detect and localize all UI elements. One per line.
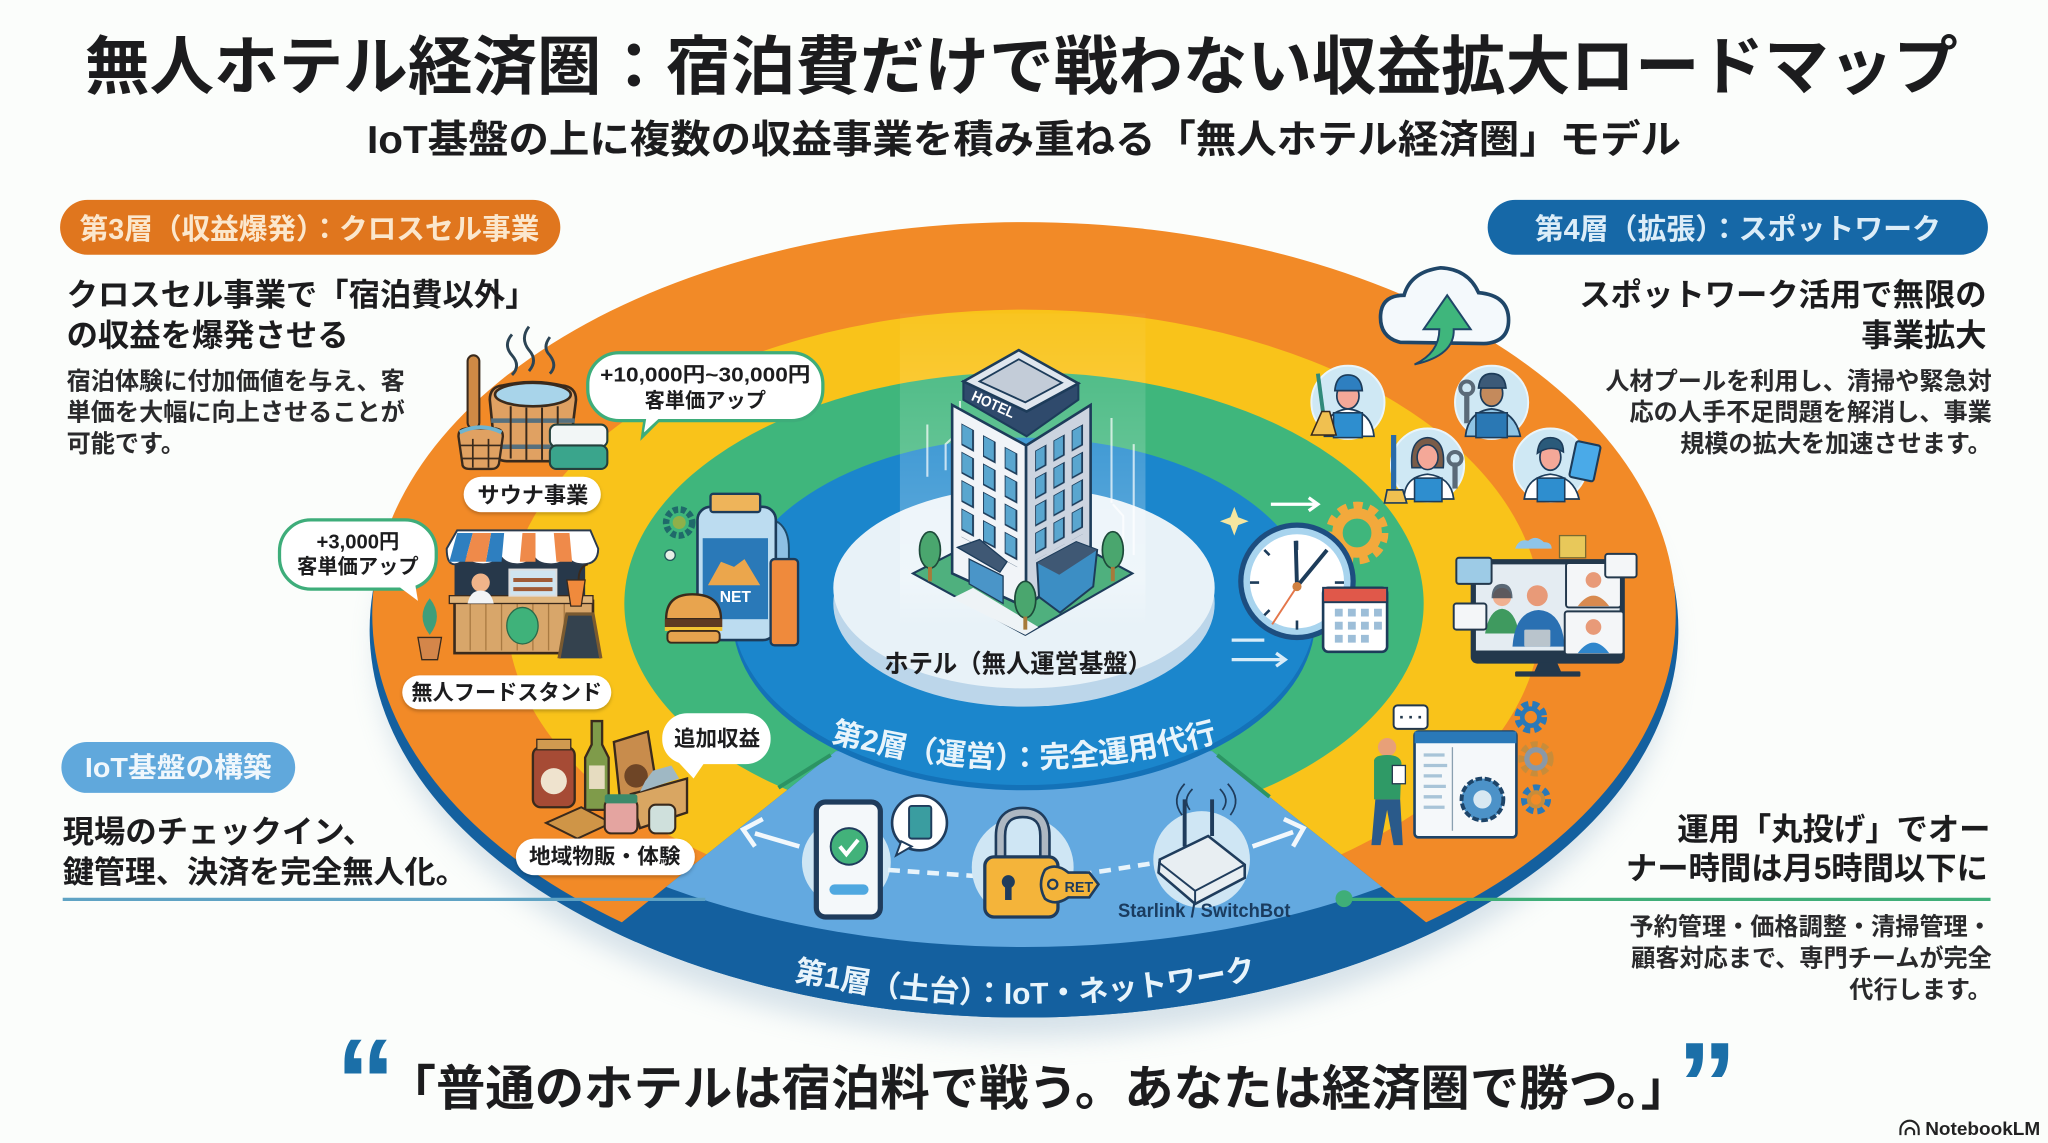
callout: sauna revenue: +10,000円~30,000円: [600, 364, 810, 386]
hotel sign text: HOTEL: [969, 388, 1017, 422]
text block: cross sell: の収益を爆発させる: [67, 318, 349, 353]
text block: operations: 運用「丸投げ」でオー: [1677, 812, 1991, 847]
icon: smart lock: [972, 812, 1098, 918]
callout: sauna revenue: 客単価アップ: [645, 390, 766, 413]
text block: operations: 予約管理・価格調整・清掃管理・: [1629, 914, 1992, 941]
icon: hotel building: [913, 350, 1132, 635]
layered disc diagram: [370, 222, 1678, 1038]
icon: arrow left: [743, 819, 799, 846]
icon: food stand: [418, 530, 601, 660]
callout: food stand revenue: 客単価アップ: [297, 555, 419, 578]
pill: layer 4: 第4層（拡張）：スポットワーク: [1535, 214, 1941, 246]
callout: extra revenue: [662, 713, 771, 779]
layer 1 ring label: 第1層（土台）：IoT・ネットワーク: [795, 956, 1250, 1006]
NotebookLM watermark: NotebookLM: [1925, 1118, 2040, 1139]
text block: spot work: 事業拡大: [1861, 318, 1987, 353]
text block: IoT: 鍵管理、決済を完全無人化。: [63, 855, 467, 890]
icon: worker cleaning: [1311, 366, 1384, 439]
callout: food stand revenue: [280, 520, 436, 601]
icon: wifi router: [1153, 784, 1250, 908]
icon: dashed connector: [888, 862, 1160, 878]
icon: NET supplies: NET: [720, 589, 751, 606]
icon: worker woman: [1384, 428, 1464, 503]
icon: remote team monitor: [1454, 536, 1637, 677]
subtitle: IoT基盤の上に複数の収益事業を積み重ねる「無人ホテル経済圏」モデル: [367, 118, 1681, 162]
label: local goods: [516, 839, 695, 875]
pill: layer 3: 第3層（収益爆発）：クロスセル事業: [80, 214, 540, 246]
text block: operations: 顧客対応まで、専門チームが完全: [1631, 945, 1992, 973]
text block: cross sell: 可能です。: [67, 431, 185, 458]
pill: layer 3: [60, 200, 560, 255]
icon: worker with tablet: [1514, 428, 1601, 502]
callout: extra revenue: 追加収益: [674, 726, 761, 751]
label: sauna: サウナ事業: [477, 483, 588, 508]
icon: local goods: [533, 721, 687, 839]
icon: worker mechanic: [1455, 366, 1528, 439]
layer 2 ring label: 第2層（運営）：完全運用代行: [832, 718, 1214, 771]
icon: cloud with arrow: [1380, 268, 1509, 364]
text block: cross sell: [67, 278, 537, 458]
text block: spot work: スポットワーク活用で無限の: [1579, 278, 1987, 313]
connector line: operations: [1336, 890, 1991, 907]
text block: spot work: 規模の拡大を加速させます。: [1680, 431, 1992, 458]
connector line: IoT: [63, 898, 705, 901]
icon: operations dashboard: [1371, 704, 1550, 845]
callout: food stand revenue: +3,000円: [317, 532, 399, 554]
quote: 「普通のホテルは宿泊料で戦う。あなたは経済圏で勝つ。」: [387, 1062, 1690, 1116]
icon: NET supplies: [665, 494, 798, 645]
pill: IoT foundation: [61, 742, 295, 793]
callout: sauna revenue: [588, 353, 823, 436]
icon: smart lock: RET: [1064, 880, 1093, 896]
quote: [336, 1014, 1737, 1143]
pill: IoT foundation: IoT基盤の構築: [85, 752, 272, 783]
label: food stand: [402, 675, 611, 709]
icon: arrow right: [1253, 819, 1304, 846]
text block: operations: 代行します。: [1849, 977, 1992, 1004]
label: food stand: 無人フードスタンド: [411, 680, 602, 705]
text block: cross sell: クロスセル事業で「宿泊費以外」: [67, 278, 537, 313]
pill: layer 4: [1488, 200, 1988, 255]
text block: cross sell: 単価を大幅に向上させることが: [67, 399, 405, 427]
text block: spot work: 応の人手不足問題を解消し、事業: [1629, 400, 1992, 427]
text block: spot work: [1579, 278, 1992, 458]
icon: sauna barrel: [458, 327, 607, 469]
label: sauna: [464, 477, 601, 512]
text block: IoT: 現場のチェックイン、: [63, 815, 374, 850]
device label: Starlink / SwitchBot: [1118, 901, 1291, 922]
icon: smartphone check-in: [802, 796, 947, 917]
text block: operations: [1626, 812, 1992, 1004]
text block: cross sell: 宿泊体験に付加価値を与え、客: [67, 368, 405, 395]
text block: spot work: 人材プールを利用し、清掃や緊急対: [1605, 368, 1992, 395]
label: local goods: 地域物販・体験: [529, 845, 681, 868]
text block: operations: ナー時間は月5時間以下に: [1626, 851, 1988, 886]
icon: clock, gear and calendar: [1220, 498, 1387, 666]
hotel label: ホテル（無人運営基盤）: [884, 651, 1152, 679]
title: 無人ホテル経済圏：宿泊費だけで戦わない収益拡大ロードマップ: [85, 31, 1958, 103]
text block: IoT: [63, 815, 467, 890]
